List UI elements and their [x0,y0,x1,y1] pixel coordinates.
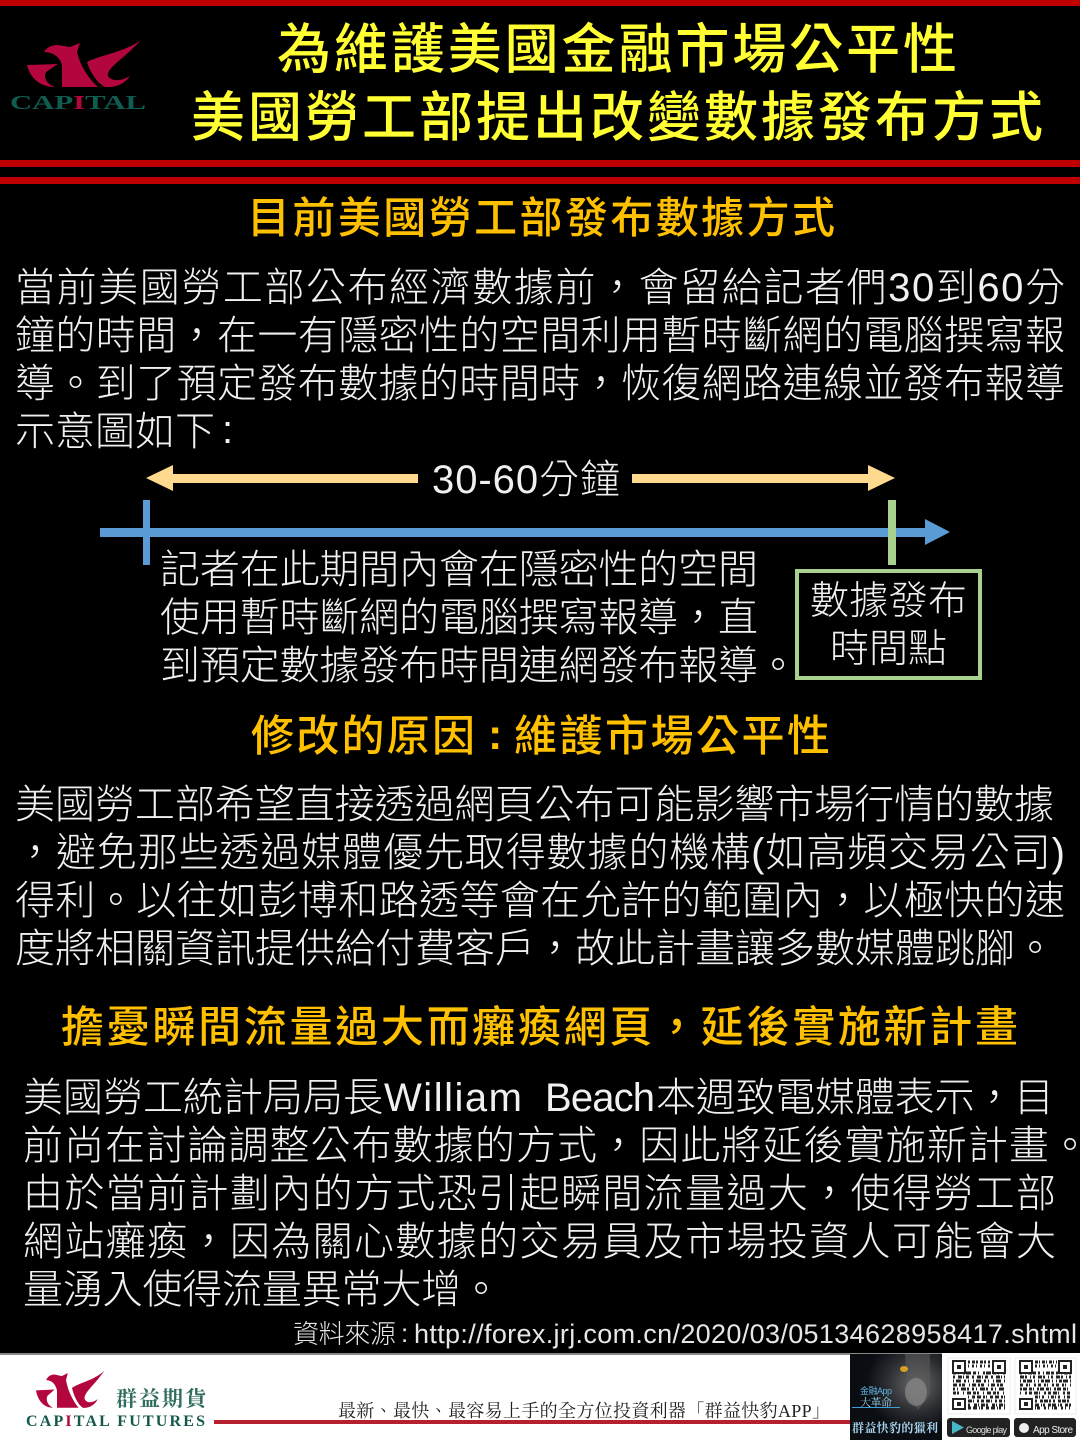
footer logo: 群益期貨 [116,1387,209,1411]
start marker [143,500,150,565]
footer logo [26,1371,209,1430]
text block: reporter period: 到預定數據發布時間連網發布報導。 [160,644,798,688]
text block: delay of the plan: 量湧入使得流量異常大增。 [23,1268,501,1312]
text block: reporter period [160,548,798,688]
QR code: App Store [1015,1358,1076,1414]
source line: 資料來源 [293,1319,396,1349]
text block: current release method: 當前美國勞工部公布經濟數據前，會留給記者們30到60分 [15,266,1065,310]
text block: reason for change: 美國勞工部希望直接透過網頁公布可能影響市場行情的數據 [15,783,1054,827]
text block: delay of the plan [23,1076,1080,1312]
footer logo: CAPITAL FUTURES [26,1413,205,1430]
footer band [0,1353,1080,1440]
promo image: leopard: 大革命 [860,1395,892,1409]
text block: current release method: 導。到了預定發布數據的時間時，恢復網路連線並發布報導 [15,362,1065,406]
title: 為維護美國金融市場公平性 [277,20,957,80]
badge: Google Play [947,1418,1010,1437]
arrow: 30-60 minute span [146,465,895,491]
source line: http://forex.jrj.com.cn/2020/03/05134628958417.shtml [414,1319,1077,1349]
heading: reason for change: 修改的原因 [251,713,475,761]
badge: App Store: App Store [1033,1425,1073,1436]
callout: release time: 時間點 [830,628,947,671]
text block: reason for change: ，避免那些透過媒體優先取得數據的機構(如高頻交易公司) [15,831,1065,875]
text block: delay of the plan: 美國勞工統計局局長 [23,1076,383,1120]
footer slogan: 最新、最快、最容易上手的全方位投資利器「群益快豹APP」 [338,1400,830,1421]
text block: delay of the plan: Beach [545,1076,655,1120]
release marker [888,500,896,565]
text block: delay of the plan: William [384,1076,522,1120]
text block: current release method [15,266,1065,454]
title [191,20,1043,148]
QR code: Google Play [948,1358,1010,1414]
source line: : [401,1318,408,1348]
promo image: leopard [850,1354,942,1440]
text block: current release method: 鐘的時間，在一有隱密性的空間利用暫時斷網的電腦撰寫報 [15,314,1065,358]
text block: current release method: : [222,408,233,452]
promo image: leopard: 群益快豹的獵利 [852,1420,938,1435]
text block: reporter period: 記者在此期間內會在隱密性的空間 [160,548,758,592]
callout: release time: 數據發布 [810,580,967,623]
arrow: time axis [100,519,950,545]
text block: reason for change [15,783,1065,971]
text block: current release method: 示意圖如下 [15,410,215,454]
text block: delay of the plan: 網站癱瘓，因為關心數據的交易員及市場投資人可能會大 [23,1220,1056,1264]
title: 美國勞工部提出改變數據發布方式 [191,88,1043,148]
badge: Google Play: Google play [966,1425,1008,1435]
callout: release time [797,571,980,678]
text block: delay of the plan: 由於當前計劃內的方式恐引起瞬間流量過大，使得勞工部 [23,1172,1056,1216]
text block: reporter period: 使用暫時斷網的電腦撰寫報導，直 [160,596,758,640]
heading: reason for change: 維護市場公平性 [514,713,830,761]
logo: Capital eagle [10,40,146,114]
heading: reason for change: : [488,711,502,759]
text block: reason for change: 度將相關資訊提供給付費客戶，故此計畫讓多數媒體跳腳。 [15,927,1055,971]
text block: delay of the plan: 本週致電媒體表示，目 [656,1076,1054,1120]
heading: current release method: 目前美國勞工部發布數據方式 [247,195,835,243]
promo image: leopard: 金融App [860,1385,892,1396]
logo: Capital eagle: CAP ITAL [10,92,146,114]
heading: reason for change [251,711,830,761]
text block: reason for change: 得利。以往如彭博和路透等會在允許的範圍內，以極快的速 [15,879,1065,923]
heading: delay of the plan: 擔憂瞬間流量過大而癱瘓網頁，延後實施新計畫 [61,1004,1018,1052]
timeline diagram [100,458,980,688]
footer rule [214,1420,850,1424]
badge: App Store [1014,1418,1076,1437]
text block: delay of the plan: 前尚在討論調整公布數據的方式，因此將延後實施新計畫。 [23,1124,1080,1168]
span label: 30-60分鐘 [432,458,620,502]
